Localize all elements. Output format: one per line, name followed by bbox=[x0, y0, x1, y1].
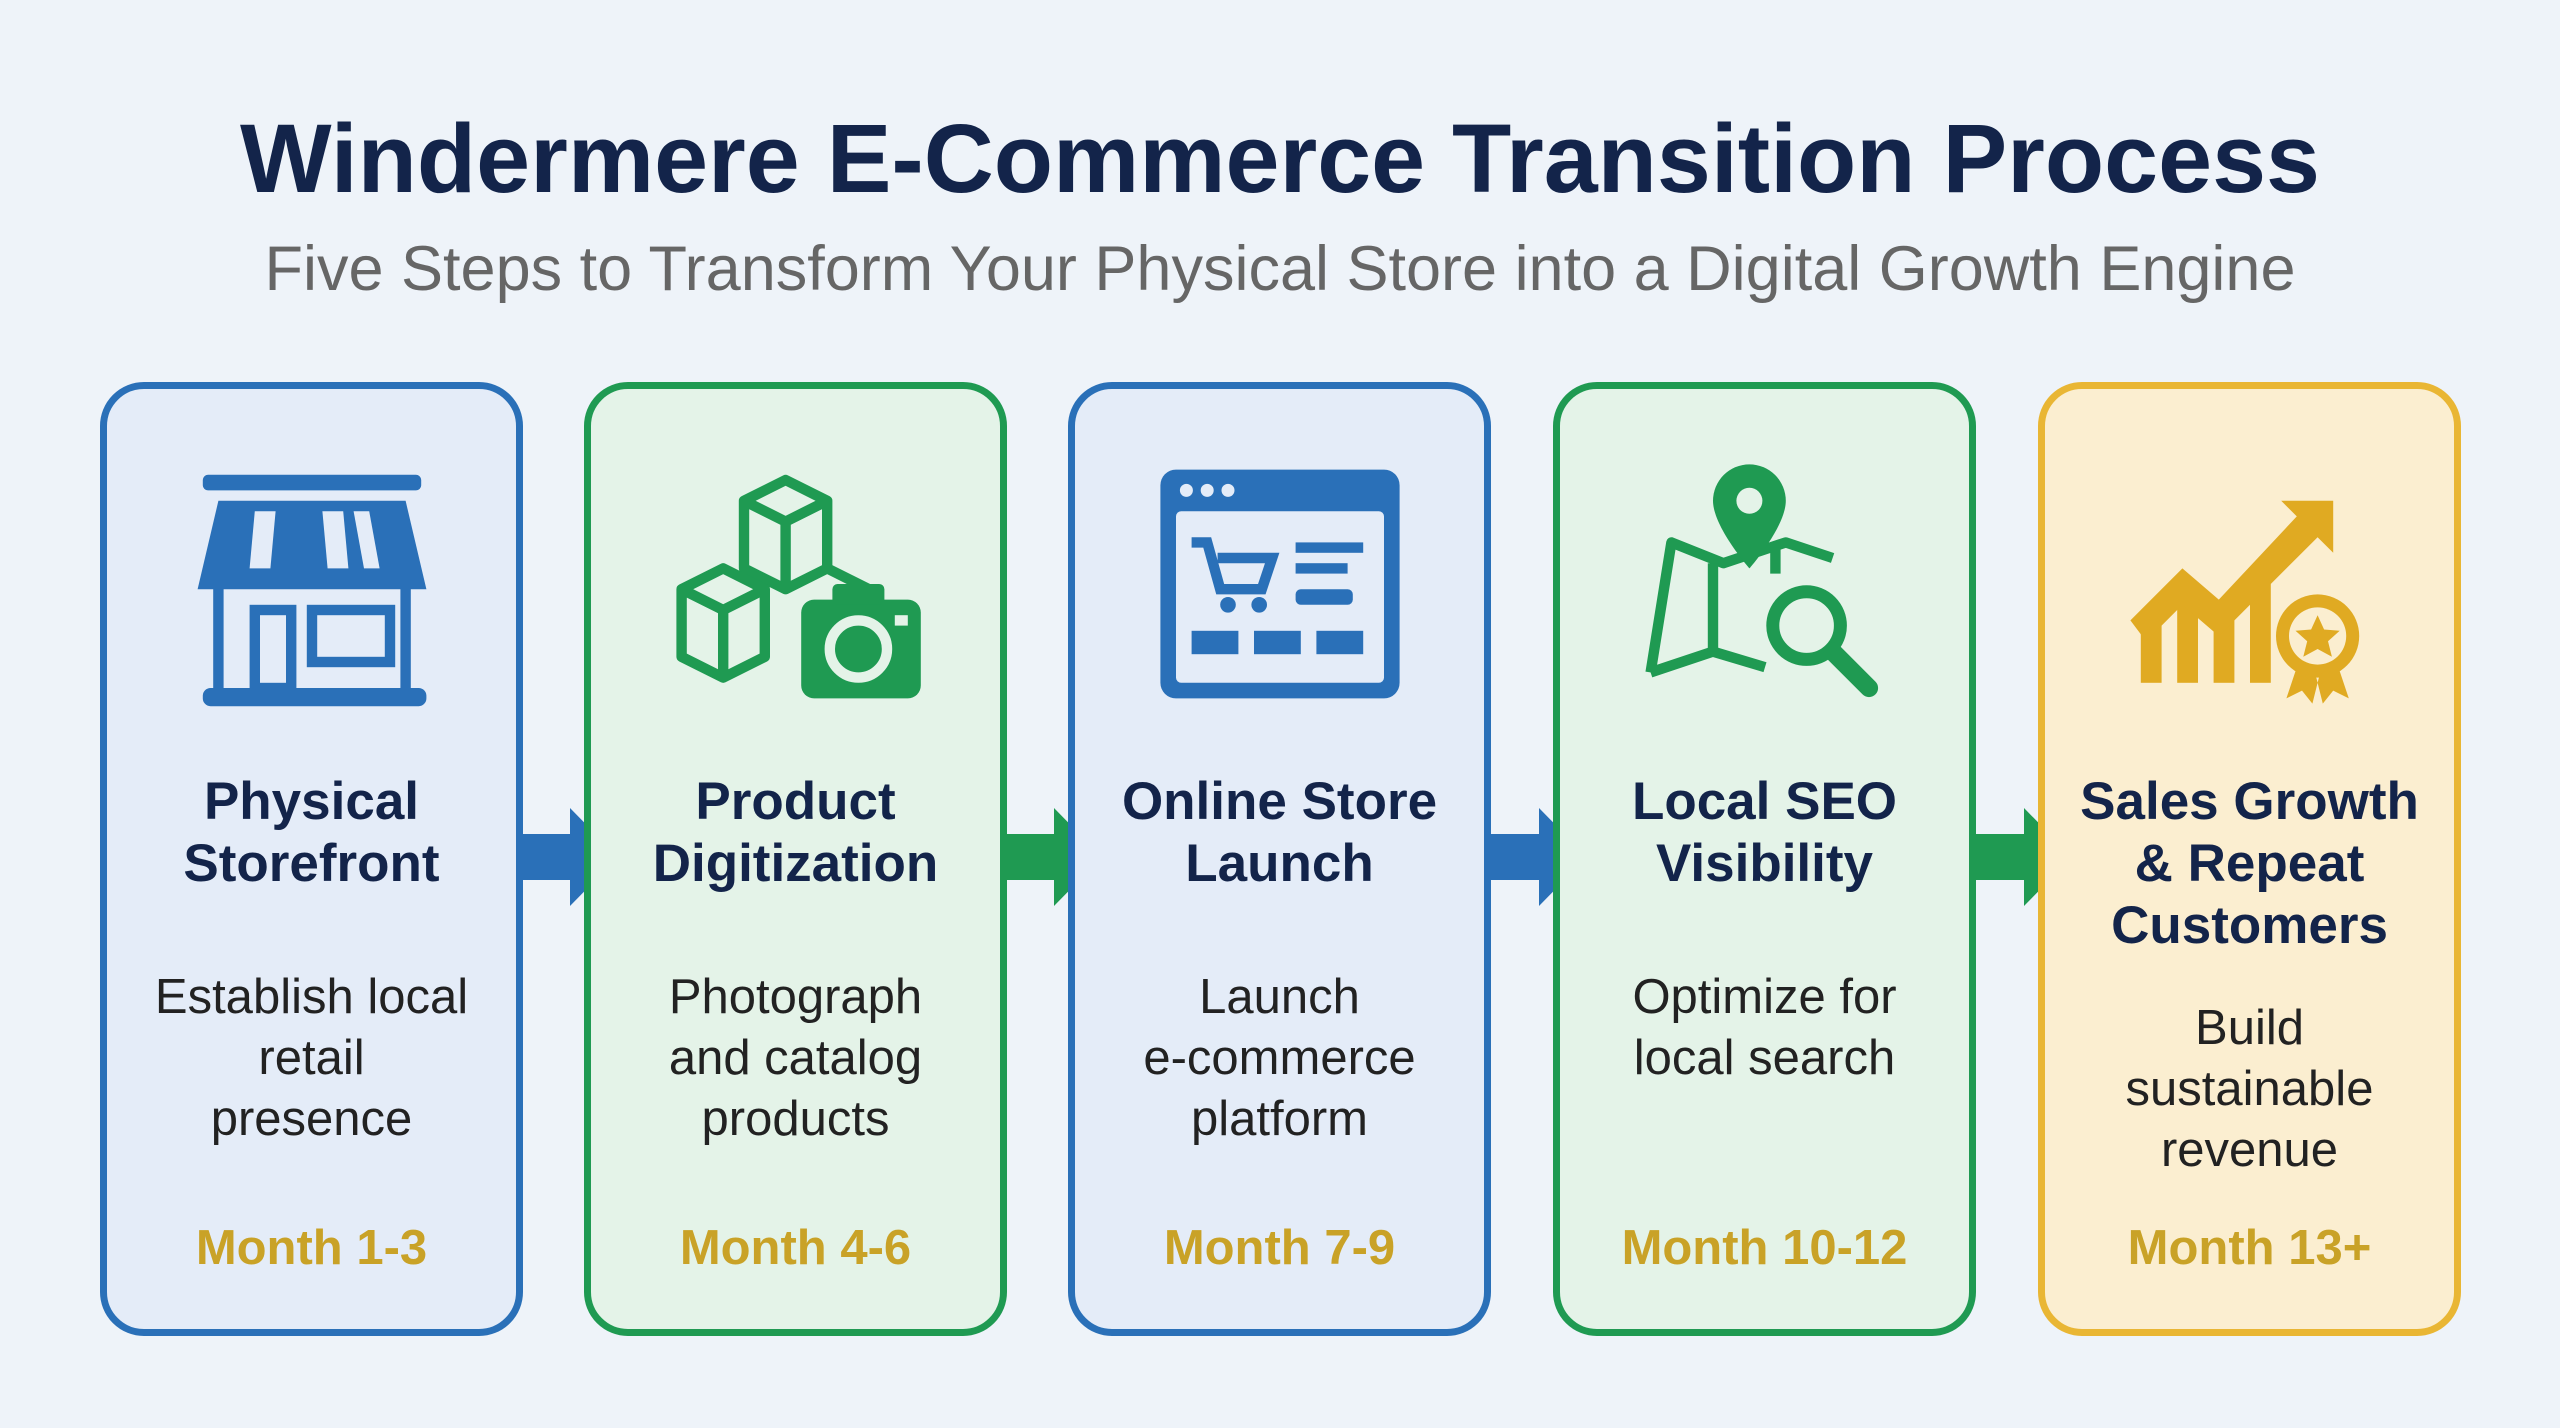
description bbox=[155, 970, 468, 1146]
timeframe: Month 13+ bbox=[2128, 1221, 2371, 1275]
heading: Local SEO bbox=[1632, 772, 1897, 831]
heading: Digitization bbox=[653, 834, 938, 893]
description: Launch bbox=[1199, 970, 1360, 1024]
arrow 4 bbox=[1976, 808, 2038, 906]
timeframe: Month 4-6 bbox=[680, 1221, 911, 1275]
icon: store bbox=[198, 474, 426, 706]
timeframe: Month 7-9 bbox=[1164, 1221, 1395, 1275]
heading: Visibility bbox=[1656, 834, 1873, 893]
description bbox=[2126, 1001, 2373, 1177]
subtitle: Five Steps to Transform Your Physical Store into a Digital Growth Engine bbox=[264, 234, 2295, 304]
timeframe: Month 10-12 bbox=[1622, 1221, 1907, 1275]
description bbox=[1632, 970, 1897, 1085]
description bbox=[669, 970, 922, 1146]
description: e-commerce bbox=[1143, 1031, 1416, 1085]
icon: growth chart badge bbox=[2130, 500, 2360, 704]
heading: Launch bbox=[1185, 834, 1374, 893]
heading: & Repeat bbox=[2135, 834, 2364, 893]
description: platform bbox=[1191, 1092, 1368, 1146]
timeframe: Month 1-3 bbox=[196, 1221, 427, 1275]
heading: Customers bbox=[2111, 896, 2388, 955]
description bbox=[1143, 970, 1416, 1146]
description: products bbox=[702, 1092, 889, 1146]
description: Photograph bbox=[669, 970, 922, 1024]
description: Build bbox=[2195, 1001, 2304, 1055]
description: local search bbox=[1634, 1031, 1895, 1085]
description: and catalog bbox=[669, 1031, 922, 1085]
description: presence bbox=[211, 1092, 412, 1146]
panel: sales growth bbox=[2038, 382, 2461, 1336]
heading bbox=[1632, 772, 1897, 893]
description: retail bbox=[258, 1031, 365, 1085]
description: Optimize for bbox=[1632, 970, 1897, 1024]
arrow 2 bbox=[1007, 808, 1068, 906]
arrow 1 bbox=[523, 808, 584, 906]
icon: browser cart bbox=[1160, 470, 1400, 698]
panel: physical storefront bbox=[100, 382, 523, 1336]
heading bbox=[653, 772, 938, 893]
icon: boxes and camera bbox=[676, 474, 921, 698]
heading: Sales Growth bbox=[2080, 772, 2419, 831]
heading bbox=[183, 772, 440, 893]
panel: product digitization bbox=[584, 382, 1007, 1336]
heading bbox=[2080, 772, 2419, 955]
panel: local SEO bbox=[1553, 382, 1976, 1336]
heading: Online Store bbox=[1122, 772, 1437, 831]
panel: online store launch bbox=[1068, 382, 1491, 1336]
arrow 3 bbox=[1491, 808, 1553, 906]
description: Establish local bbox=[155, 970, 468, 1024]
description: revenue bbox=[2161, 1123, 2338, 1177]
heading: Product bbox=[695, 772, 896, 831]
heading: Physical bbox=[204, 772, 419, 831]
description: sustainable bbox=[2126, 1062, 2373, 1116]
icon: map pin magnifier bbox=[1646, 464, 1878, 698]
title: Windermere E-Commerce Transition Process bbox=[240, 104, 2320, 213]
heading: Storefront bbox=[183, 834, 440, 893]
heading bbox=[1122, 772, 1437, 893]
